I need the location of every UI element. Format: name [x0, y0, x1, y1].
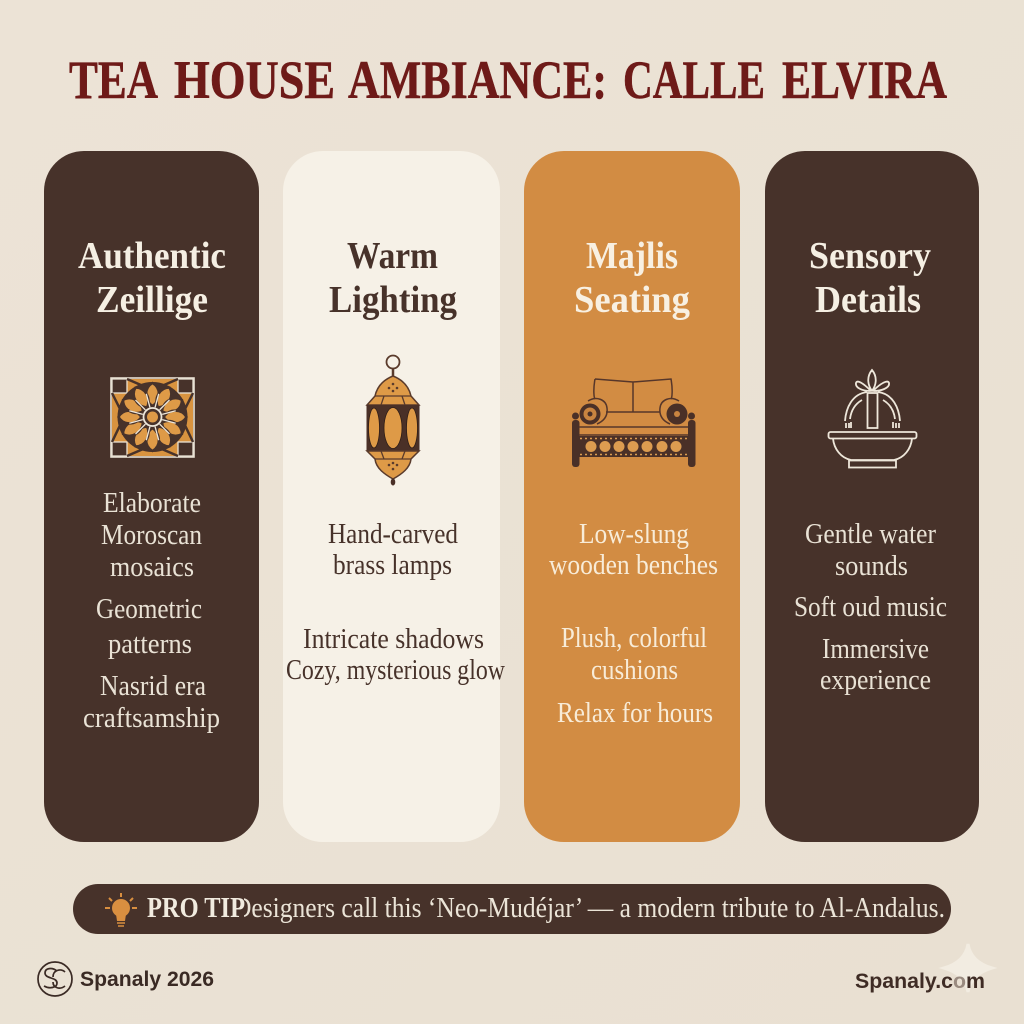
body text: Hand-carved	[328, 519, 458, 550]
pro tip bar	[73, 884, 951, 934]
title: ELVIRA	[782, 50, 947, 110]
body text: Intricate shadows	[303, 624, 484, 655]
body text: craftsamship	[83, 703, 220, 734]
icon: majlis bench	[572, 379, 696, 467]
heading	[78, 235, 226, 321]
heading: Lighting	[329, 279, 457, 321]
body text: patterns	[108, 629, 192, 660]
icon: light bulb	[105, 893, 137, 926]
title: HOUSE	[174, 50, 335, 110]
heading: Warm	[347, 235, 438, 277]
title: CALLE	[623, 50, 765, 110]
panel: warm lighting	[283, 151, 506, 842]
heading: Majlis	[586, 235, 678, 277]
heading: Details	[815, 279, 921, 321]
body text	[83, 488, 220, 734]
panel background	[44, 151, 259, 842]
panel background	[765, 151, 979, 842]
panel: majlis seating	[524, 151, 740, 842]
body text: Nasrid era	[100, 671, 207, 702]
footer brand right: Spanaly.com	[855, 970, 985, 993]
heading: Authentic	[78, 235, 226, 277]
body text: Moroscan	[101, 520, 202, 551]
body text: Low-slung	[579, 519, 689, 550]
panel background	[524, 151, 740, 842]
body text: Elaborate	[103, 488, 201, 519]
icon: lantern	[366, 356, 420, 486]
body text: experience	[820, 665, 931, 696]
footer brand left: Spanaly 2026	[80, 968, 214, 991]
body text: Geometric	[96, 594, 202, 625]
heading: Sensory	[809, 235, 931, 277]
title	[69, 50, 947, 110]
panel: authentic zeillige	[44, 151, 259, 842]
body text: Immersive	[822, 634, 929, 665]
heading	[809, 235, 931, 321]
body text: brass lamps	[333, 550, 452, 581]
body text: Plush, colorful	[561, 623, 707, 654]
footer logo	[38, 962, 72, 996]
body text: Gentle water	[805, 519, 937, 550]
body text: Soft oud music	[794, 592, 947, 623]
heading: Seating	[574, 279, 690, 321]
decorative star	[944, 944, 992, 992]
body text: sounds	[835, 551, 908, 582]
body text: cushions	[591, 655, 678, 686]
icon: zellige tile	[111, 378, 194, 457]
panel: sensory details	[765, 151, 979, 842]
body text: wooden benches	[549, 550, 718, 581]
heading	[574, 235, 690, 321]
title: AMBIANCE:	[348, 50, 607, 110]
body text: mosaics	[110, 552, 194, 583]
pill background	[73, 884, 951, 934]
body text	[286, 519, 506, 686]
panel background	[283, 151, 500, 842]
icon: fountain	[828, 370, 916, 468]
heading	[329, 235, 457, 321]
tip text: Designers call this ‘Neo-Mudéjar’ — a modern tribute to Al-Andalus.	[233, 893, 945, 924]
body text	[549, 519, 718, 729]
body text: Relax for hours	[557, 698, 713, 729]
title: TEA	[69, 50, 158, 110]
heading: Zeillige	[96, 279, 208, 321]
pro tip label: PRO TIP	[147, 893, 245, 924]
body text	[794, 519, 947, 696]
body text: Cozy, mysterious glow	[286, 655, 506, 686]
